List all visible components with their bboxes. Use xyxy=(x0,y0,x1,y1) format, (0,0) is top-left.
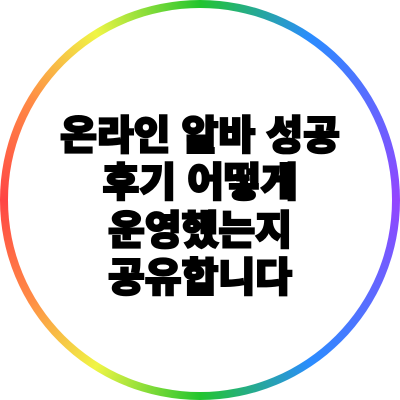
title line 2: 후기 어떻게 xyxy=(102,161,298,205)
title line 1: 온라인 알바 성공 xyxy=(60,114,340,158)
title line 3: 운영했는지 xyxy=(108,208,292,252)
title xyxy=(60,114,340,300)
title line 4: 공유합니다 xyxy=(108,256,292,300)
